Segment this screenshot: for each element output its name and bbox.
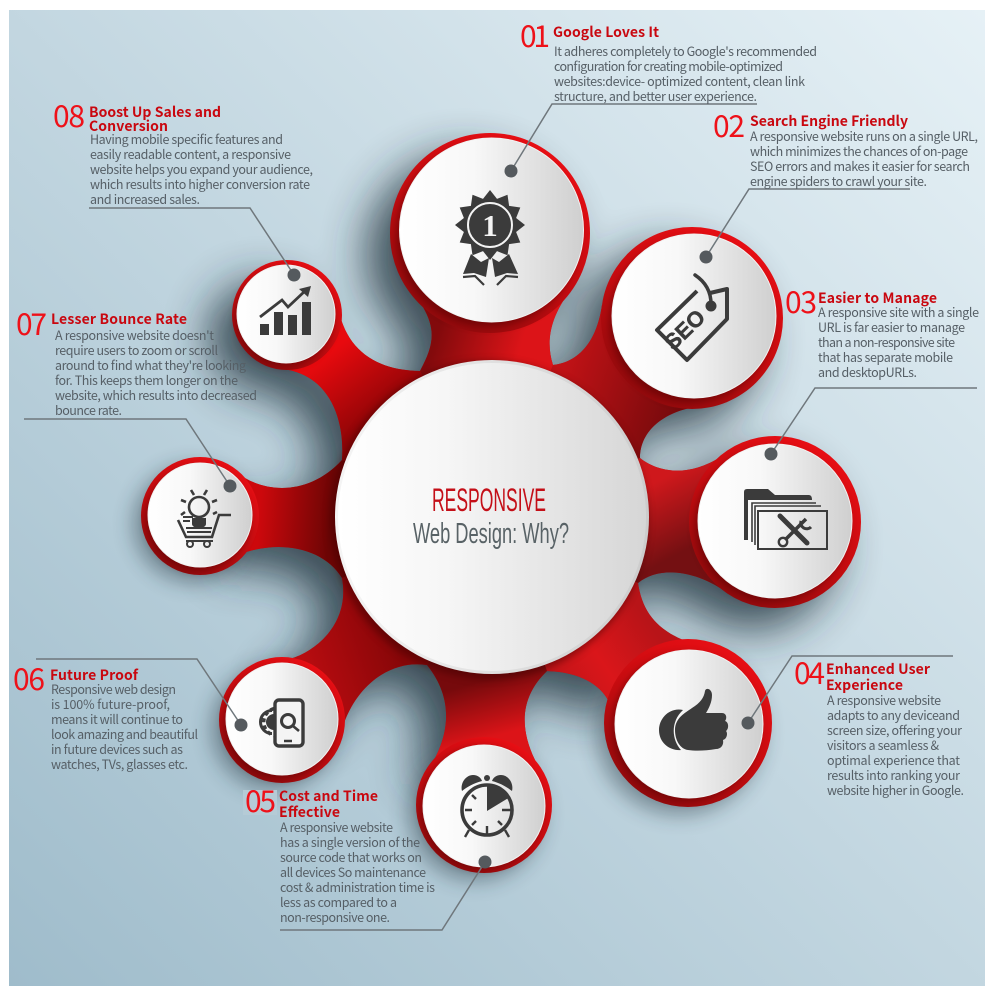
text block 08: [53, 92, 313, 208]
icon: folders with wrench and screwdriver: [744, 489, 827, 549]
leader line 08: [89, 208, 300, 282]
text block 03: Easier to Manage: [818, 288, 937, 308]
icon: light bulb and shopping cart: [178, 490, 231, 547]
text block 03: A responsive site with a single: [818, 302, 979, 321]
text block 07: A responsive website doesn't: [55, 325, 214, 344]
text block 04: website higher in Google.: [827, 780, 964, 799]
icon: SEO price tag: [657, 275, 727, 360]
node 08: growth chart: [232, 260, 342, 370]
icon: bar chart with arrow: [260, 286, 311, 335]
node 01: award ribbon: [390, 133, 590, 333]
text block 08: easily readable content, a responsive: [90, 144, 291, 163]
text block 05: [243, 777, 435, 926]
text block 06: means it will continue to: [51, 709, 183, 728]
text block 01: [520, 12, 817, 105]
text block 01: It adheres completely to Google's recommended: [554, 41, 817, 60]
drop shadow of hub: [208, 155, 837, 784]
text block 05: non-responsive one.: [280, 907, 390, 926]
text block 03: [785, 278, 979, 381]
leader line 04: [742, 656, 953, 730]
icon: thumbs up: [659, 689, 728, 751]
text block 02: A responsive website runs on a single URL,: [750, 126, 978, 145]
text block 06: [13, 655, 198, 773]
text block 01: configuration for creating mobile-optimized: [554, 56, 783, 75]
leader line 01: [504, 104, 757, 178]
text block 04: Experience: [826, 675, 903, 695]
text block 04: adapts to any deviceand: [827, 705, 960, 724]
title: responsive: RESPONSIVE: [432, 482, 546, 518]
icon: SEO price tag: SEO: [659, 304, 710, 355]
text block 06: is 100% future-proof,: [51, 694, 170, 713]
text block 02: engine spiders to crawl your site.: [750, 171, 927, 190]
text block 01: 01: [520, 12, 550, 56]
text block 07: for. This keeps them longer on the: [55, 370, 238, 389]
text block 05: cost & administration time is: [280, 877, 435, 896]
text block 04: visitors a seamless &: [827, 735, 939, 754]
text block 06: Responsive web design: [51, 679, 176, 698]
text block 05: all devices So maintenance: [280, 862, 426, 881]
text block 05: has a single version of the: [280, 832, 420, 851]
node 04: thumbs up: [604, 639, 772, 807]
node 06: gear and phone search: [219, 657, 345, 783]
text block 04: results into ranking your: [827, 765, 960, 784]
text block 07: website, which results into decreased: [55, 385, 257, 404]
leader line 05: [280, 856, 492, 930]
text block 02: Search Engine Friendly: [750, 111, 908, 131]
text block 08: which results into higher conversion rate: [90, 174, 310, 193]
text block 08: website helps you expand your audience,: [90, 159, 313, 178]
node 03: folder and tools: [689, 436, 861, 608]
text block 07: around to find what they're looking: [55, 355, 246, 374]
text block 06: 06: [13, 655, 45, 699]
text block 06: watches, TVs, glasses etc.: [51, 754, 188, 773]
text block 08: Having mobile specific features and: [90, 129, 283, 148]
leader line 03: [764, 388, 977, 460]
text block 01: structure, and better user experience.: [554, 86, 757, 105]
text block 04: [794, 649, 964, 799]
node 07: bulb in cart: [141, 457, 259, 575]
text block 04: 04: [794, 649, 825, 693]
text block 08: Conversion: [89, 116, 168, 136]
text block 02: 02: [713, 102, 745, 146]
text block 06: look amazing and beautiful: [51, 724, 198, 743]
text block 03: than a non-responsive site: [818, 332, 955, 351]
text block 05: source code that works on: [280, 847, 422, 866]
icon: award badge: 1: [482, 208, 498, 243]
text block 02: SEO errors and makes it easier for search: [750, 156, 970, 175]
center circle: [330, 360, 649, 679]
text block 07: Lesser Bounce Rate: [51, 309, 187, 329]
text block 02: [713, 102, 978, 190]
text block 02: which minimizes the chances of on-page: [750, 141, 968, 160]
text block 06: in future devices such as: [51, 739, 183, 758]
text block 04: Enhanced User: [826, 659, 931, 679]
text block 06: Future Proof: [50, 665, 139, 685]
leader line 02: [700, 189, 910, 264]
text block 05: 05: [245, 777, 276, 821]
text block 07: 07: [16, 300, 47, 344]
text block 07: [16, 300, 257, 419]
icon: alarm clock: [462, 775, 512, 837]
text block 01: Google Loves It: [553, 22, 659, 42]
text block 04: A responsive website: [827, 690, 941, 709]
text block 08: and increased sales.: [90, 189, 200, 208]
text block 03: URL is far easier to manage: [818, 317, 965, 336]
text block 05: Effective: [279, 802, 340, 822]
text block 07: bounce rate.: [55, 400, 122, 419]
text block 05: A responsive website: [280, 817, 393, 836]
drop shadow of lower nodes: [133, 465, 764, 881]
text block 08: Boost Up Sales and: [89, 102, 221, 122]
icon: gear with phone and magnifier: [260, 700, 303, 746]
node 05: alarm clock: [416, 737, 552, 873]
text block 03: that has separate mobile: [818, 347, 953, 366]
text block 05: less as compared to a: [280, 892, 397, 911]
text block 01: websites:device- optimized content, clean link: [554, 71, 805, 90]
text block 03: 03: [785, 278, 817, 322]
text block 04: screen size, offering your: [827, 720, 962, 739]
text block 04: optimal experience that: [827, 750, 960, 769]
text block 07: require users to zoom or scroll: [55, 340, 218, 359]
icon: award badge: [455, 190, 525, 285]
leader line 07: [24, 419, 236, 492]
text block 08: 08: [53, 92, 85, 136]
red hub with eight arms: [244, 300, 720, 760]
text block 05: Cost and Time: [279, 786, 378, 806]
leader line 06: [36, 659, 248, 732]
text block 03: and desktopURLs.: [818, 362, 917, 381]
node 02: SEO tag: [601, 227, 783, 409]
subtitle: Web Design: Why?: [413, 518, 569, 550]
